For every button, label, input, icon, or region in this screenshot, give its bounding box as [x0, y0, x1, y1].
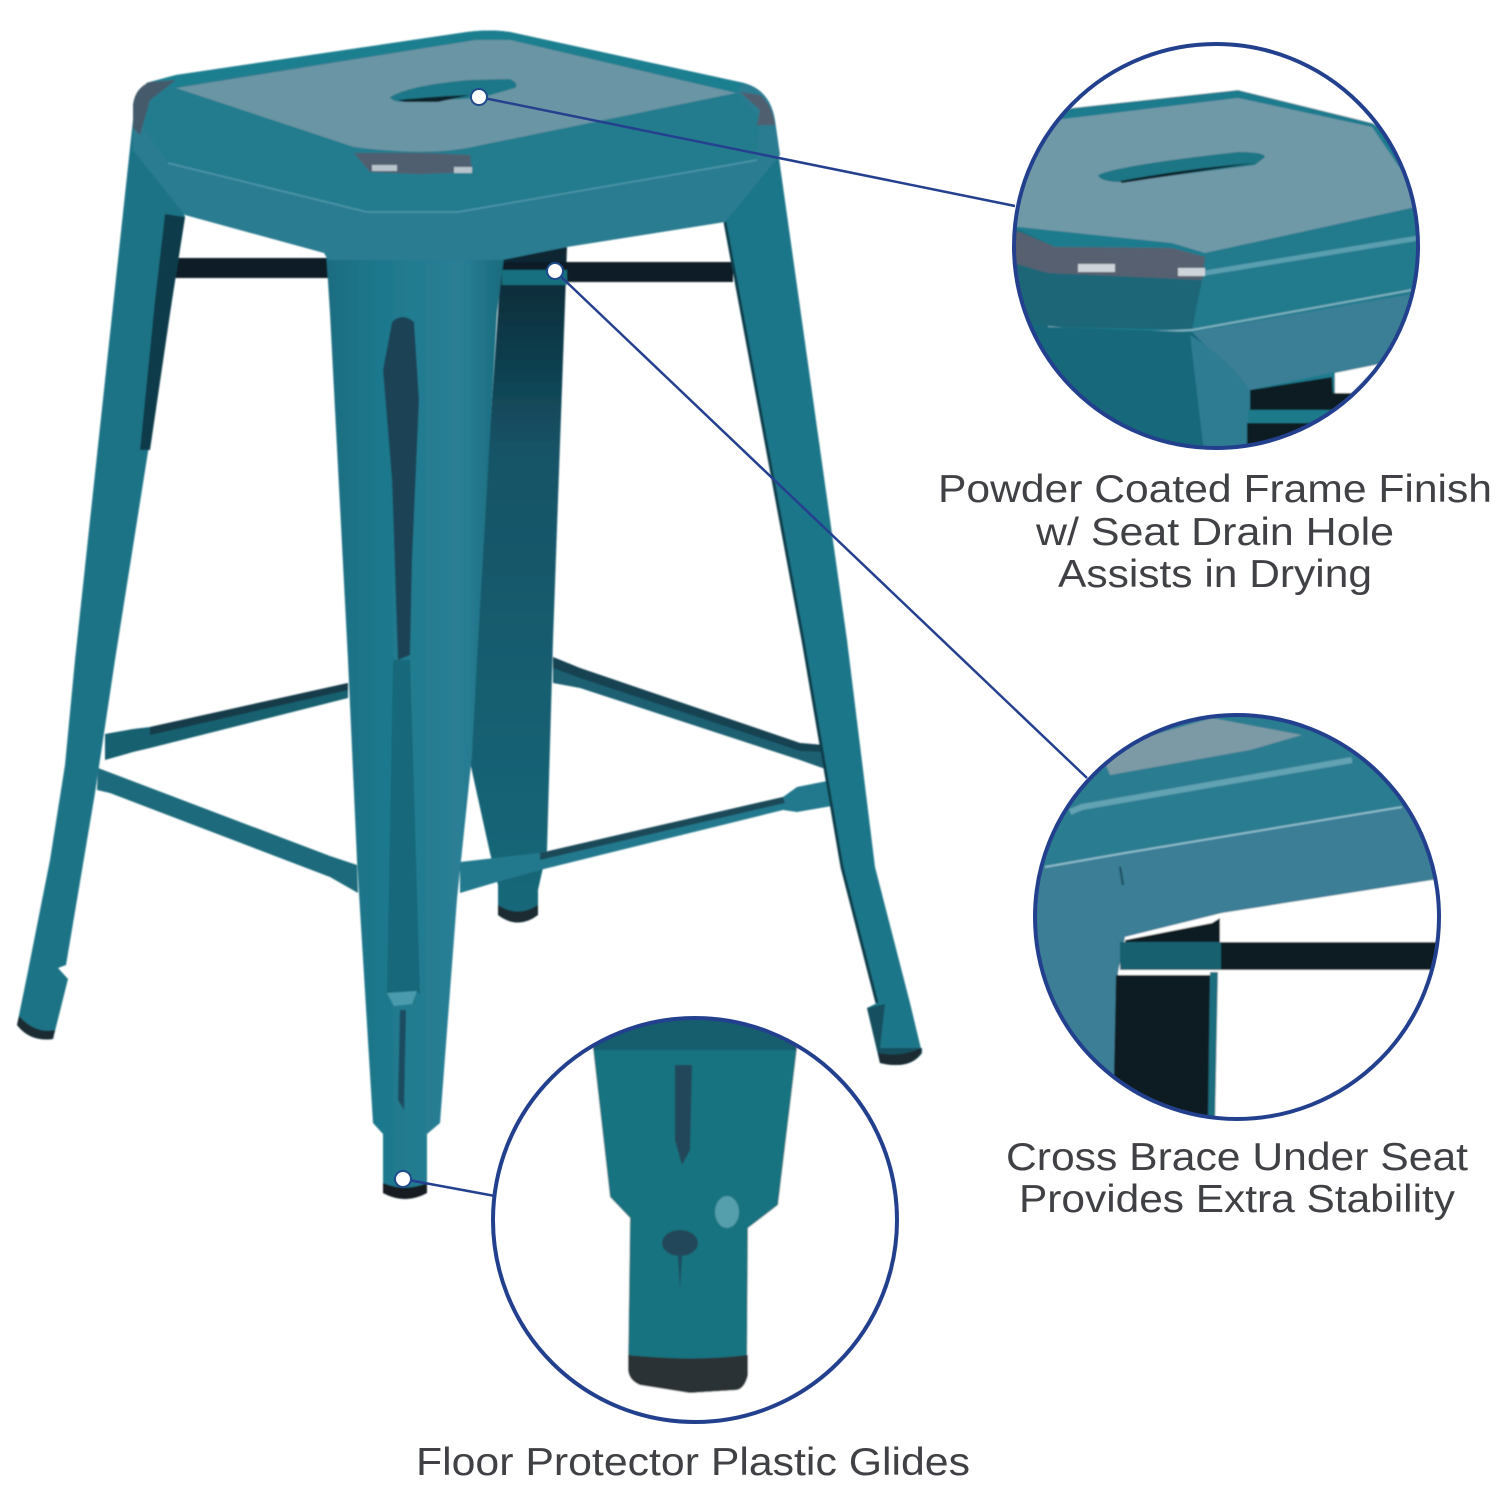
illustration: teal metal stool	[17, 30, 922, 1199]
callout line: cross brace	[547, 263, 1087, 778]
caption: floor glide: Floor Protector Plastic Glides	[416, 1441, 970, 1484]
caption: seat drain hole	[938, 468, 1492, 596]
right leg inner edge	[725, 222, 877, 1003]
right leg	[725, 130, 922, 1065]
seat back rim	[146, 30, 744, 93]
front leg channel	[387, 660, 420, 993]
callout line: seat	[471, 89, 1015, 206]
caption: seat drain hole: Assists in Drying	[1058, 553, 1372, 596]
left leg inner shadow	[140, 214, 185, 450]
detail circle: seat drain hole	[1010, 40, 1425, 460]
drain hole	[390, 79, 517, 102]
detail circle: cross brace	[1030, 710, 1445, 1125]
footrest braces	[97, 657, 832, 893]
seat front rim	[138, 45, 760, 212]
front glide	[383, 1183, 427, 1199]
caption: cross brace: Provides Extra Stability	[1019, 1178, 1456, 1221]
seat apron	[133, 30, 780, 260]
left glide	[17, 1016, 55, 1039]
caption: cross brace: Cross Brace Under Seat	[1006, 1136, 1468, 1179]
caption: seat drain hole: Powder Coated Frame Finish	[938, 468, 1492, 511]
caption: cross brace	[1006, 1136, 1468, 1221]
left leg	[17, 120, 185, 1039]
seat apron seam	[168, 160, 757, 212]
distressed seat corners	[133, 80, 775, 174]
front leg	[326, 250, 505, 1199]
scratch on front leg	[383, 317, 419, 660]
right glide	[867, 1004, 922, 1065]
cross brace under seat	[170, 258, 733, 285]
callout line: glide	[395, 1171, 495, 1196]
back leg	[468, 247, 567, 922]
caption: seat drain hole: w/ Seat Drain Hole	[1035, 511, 1394, 554]
seat top panel	[176, 40, 736, 152]
detail circle: floor glide	[490, 1010, 900, 1425]
